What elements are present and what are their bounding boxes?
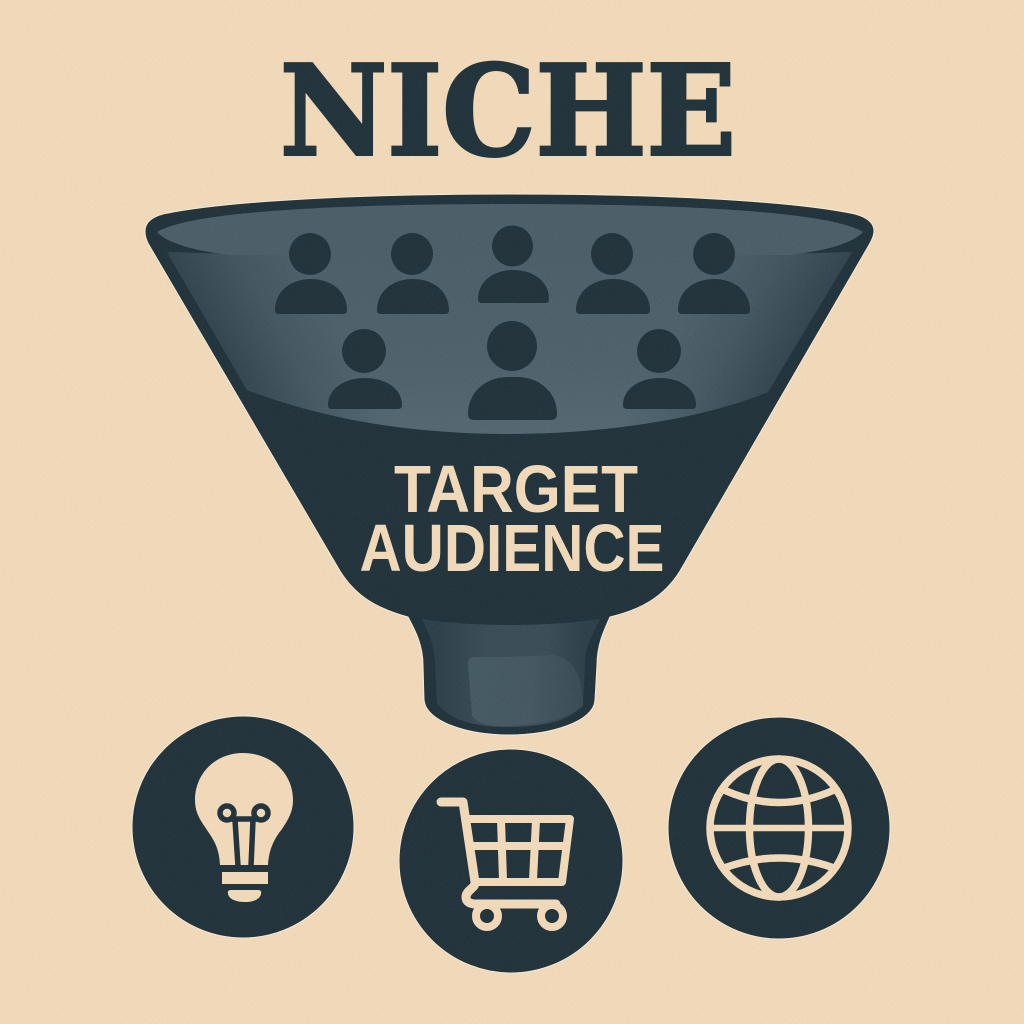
wheel left [476,905,498,927]
icon circle: light bulb [132,716,354,938]
cart handle and frame [441,802,556,904]
right wall shading [510,252,852,434]
funnel interior glass [167,252,852,434]
filament [220,806,268,866]
title: NICHE [280,38,736,184]
icon: shopping cart [441,802,570,927]
person 3 [478,226,549,303]
person 1 [275,233,347,314]
label line 1: TARGET [394,452,638,527]
bulb tip [228,890,261,902]
spout inner [422,619,600,727]
icon: globe [710,759,848,897]
bulb base [222,872,268,884]
cart basket [468,819,570,882]
spout highlight [468,655,583,726]
icon: light bulb [195,753,293,902]
cart grid [471,820,566,880]
bulb glass [195,753,293,865]
person 7 [468,321,557,420]
funnel label [360,452,664,586]
icon circle: globe [668,717,890,939]
rim opening [157,204,863,255]
person 5 [678,233,750,314]
icon circle: shopping cart [399,749,623,973]
wheel right [541,905,563,927]
left wall shading [167,252,510,434]
person 8 [623,329,696,409]
people group [275,226,750,420]
funnel [145,194,874,735]
person 6 [328,329,402,409]
person 4 [576,233,650,314]
label line 2: AUDIENCE [360,511,664,586]
funnel body outline [145,194,874,735]
person 2 [377,233,449,314]
